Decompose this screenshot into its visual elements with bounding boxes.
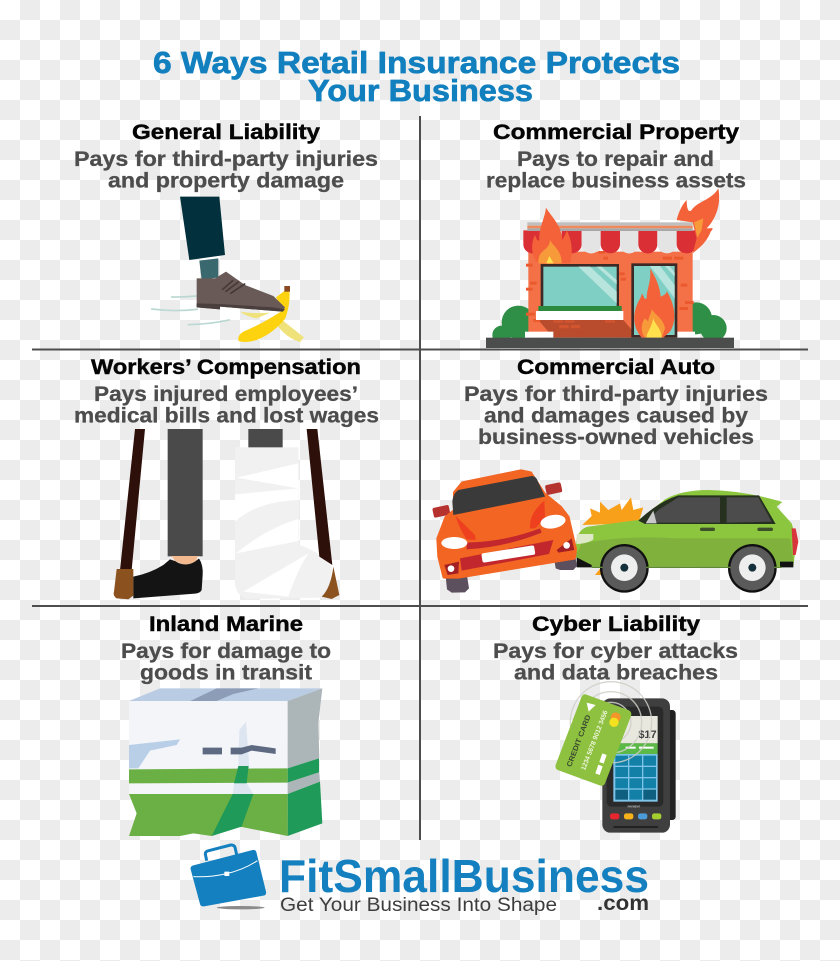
text: commercial property description: Pays to repair and bbox=[517, 147, 714, 171]
icon: credit card and payment terminal bbox=[555, 682, 676, 833]
icon: credit card and payment terminal: $17 bbox=[638, 729, 657, 741]
logo: Fit Small Business bbox=[191, 845, 649, 916]
heading: commercial property: Commercial Property bbox=[493, 121, 739, 144]
text: inland marine description: Pays for damage to bbox=[121, 639, 331, 663]
panel: commercial property bbox=[486, 121, 746, 348]
text: inland marine description bbox=[121, 639, 331, 684]
text: workers compensation description: Pays injured employees’ bbox=[94, 382, 358, 406]
heading: workers compensation: Workers’ Compensation bbox=[91, 356, 361, 379]
text: general liability description: and property damage bbox=[108, 168, 344, 192]
icon: crushed box bbox=[129, 688, 322, 836]
heading: general liability: General Liability bbox=[132, 121, 320, 144]
text: workers compensation description: medical bills and lost wages bbox=[74, 404, 379, 428]
text: cyber liability description: and data breaches bbox=[514, 660, 718, 684]
text: commercial auto description: business-owned vehicles bbox=[478, 425, 754, 449]
text: commercial auto description: and damages caused by bbox=[484, 404, 748, 428]
panel: commercial auto bbox=[432, 356, 798, 593]
icon: store on fire bbox=[486, 188, 734, 348]
text: commercial auto description bbox=[464, 382, 768, 449]
icon: credit card and payment terminal: PAYMENT bbox=[628, 804, 641, 808]
panel: general liability bbox=[74, 121, 378, 342]
text: general liability description: Pays for third-party injuries bbox=[74, 147, 378, 171]
logo tagline: Get Your Business Into Shape bbox=[280, 895, 557, 916]
logo wordmark: FitSmallBusiness bbox=[279, 850, 649, 902]
title: 6 Ways Retail Insurance Protects bbox=[153, 46, 680, 80]
text: inland marine description: goods in transit bbox=[140, 660, 312, 684]
text: commercial auto description: Pays for third-party injuries bbox=[464, 382, 768, 406]
text: cyber liability description: Pays for cyber attacks bbox=[493, 639, 738, 663]
text: general liability description bbox=[74, 147, 378, 192]
text: workers compensation description bbox=[74, 382, 379, 428]
icon: credit card and payment terminal: CREDIT CARD bbox=[564, 713, 593, 768]
text: commercial property description: replace business assets bbox=[486, 168, 746, 192]
panel: cyber liability bbox=[493, 613, 738, 833]
title: Your Business bbox=[308, 74, 533, 108]
panel: inland marine bbox=[121, 613, 331, 836]
text: commercial property description bbox=[486, 147, 746, 192]
heading: inland marine: Inland Marine bbox=[149, 613, 303, 636]
heading: commercial auto: Commercial Auto bbox=[517, 356, 715, 379]
icon: briefcase bbox=[191, 845, 266, 909]
panel: workers compensation bbox=[74, 356, 379, 599]
icon: foot slipping on banana peel bbox=[152, 197, 304, 342]
heading: cyber liability: Cyber Liability bbox=[532, 613, 700, 636]
icon: credit card and payment terminal: 1234 5678 9012 3456 bbox=[580, 709, 610, 771]
icon: car crash bbox=[432, 471, 798, 593]
logo domain: .com bbox=[597, 892, 649, 915]
text: cyber liability description bbox=[493, 639, 738, 684]
title bbox=[153, 46, 680, 108]
icon: leg cast and crutches bbox=[114, 429, 339, 599]
